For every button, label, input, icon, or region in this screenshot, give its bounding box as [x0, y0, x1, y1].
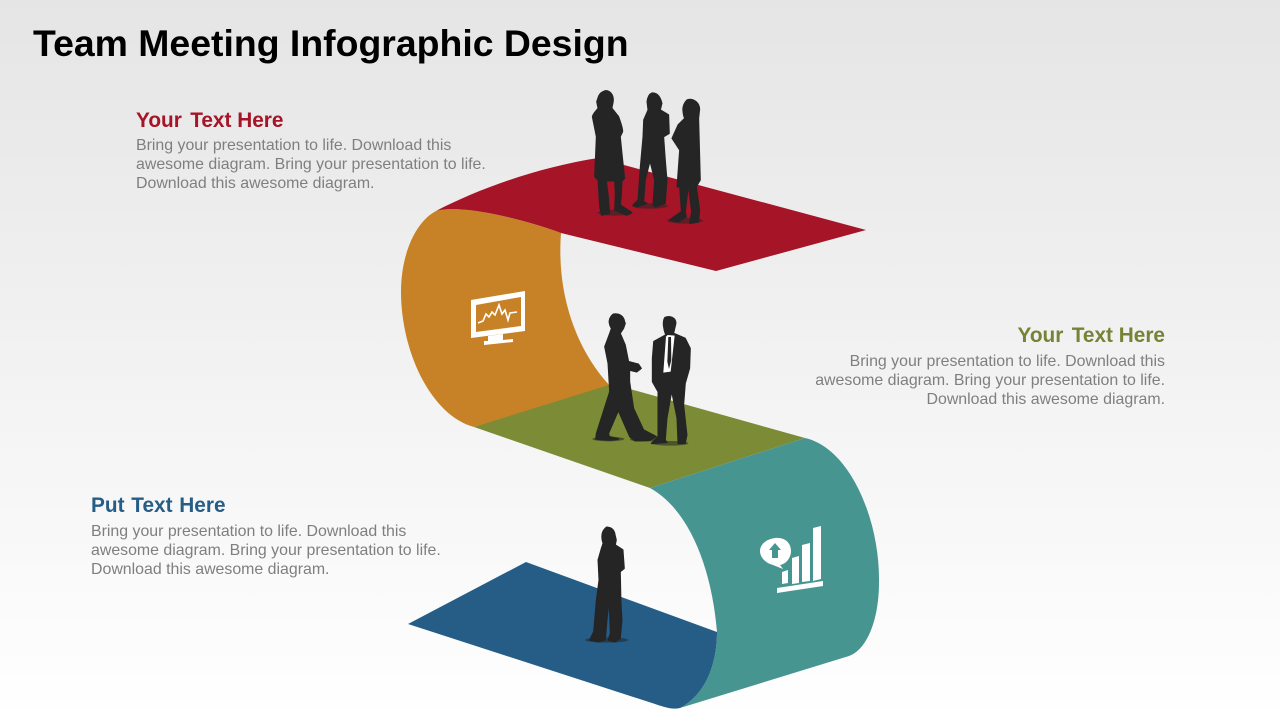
ribbon: blue platform [408, 562, 717, 709]
text block: right: Your Text Here [1018, 324, 1165, 347]
text block: bottom left: Put Text Here [91, 494, 226, 517]
text block: top left: Download this awesome diagram. [136, 175, 374, 192]
ribbon: olive platform [474, 384, 805, 488]
text block: bottom left: awesome diagram. Bring your presentation to life. [91, 542, 441, 559]
text block: right: awesome diagram. Bring your presentation to life. [815, 372, 1165, 389]
text block: top left: Your Text Here [136, 109, 283, 132]
icon: monitor with chart line [471, 291, 525, 345]
text block: right: Download this awesome diagram. [927, 391, 1165, 408]
silhouettes: two men on olive platform [592, 314, 690, 446]
text block: bottom left: Download this awesome diagram. [91, 561, 329, 578]
silhouettes: three women on red platform [593, 91, 703, 224]
ribbon: teal curve [650, 438, 879, 708]
text block: top left [136, 109, 486, 192]
text block: right [815, 324, 1165, 408]
ribbon: red platform [436, 158, 866, 271]
text block: right: Bring your presentation to life. Download this [850, 353, 1165, 370]
text block: bottom left [91, 494, 441, 578]
icon: growth bars with upload bubble [760, 526, 823, 593]
ribbon: orange curve [401, 209, 612, 427]
text block: top left: Bring your presentation to life. Download this [136, 137, 451, 154]
silhouette: woman on blue platform [585, 527, 628, 643]
text block: bottom left: Bring your presentation to life. Download this [91, 523, 406, 540]
title: Team Meeting Infographic Design [33, 22, 629, 64]
text block: top left: awesome diagram. Bring your presentation to life. [136, 156, 486, 173]
